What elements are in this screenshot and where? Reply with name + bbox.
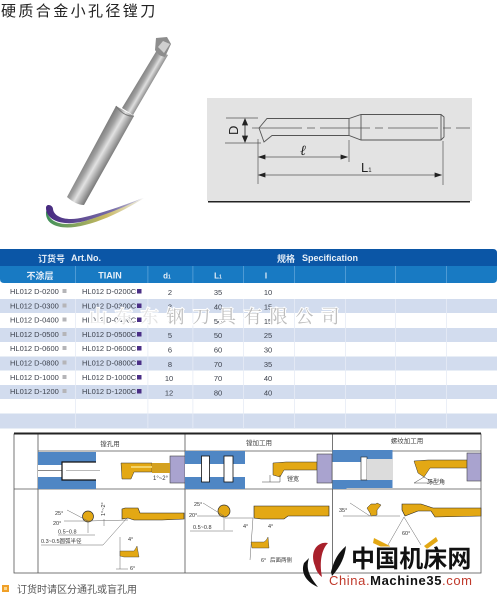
icon: boring tool photo [46, 37, 171, 227]
table rows: HL012 D-1200 [10, 387, 59, 396]
table header: order number and specification: Specification [302, 253, 358, 263]
table header: columns: TIAIN [98, 270, 122, 280]
frame [14, 434, 481, 573]
diagram: thread tool [414, 453, 481, 486]
table header: columns [0, 266, 497, 283]
diagram: bore geometry: 20° [53, 521, 61, 527]
diagram: grooving geometry: 4° [268, 524, 273, 530]
diagram: thread geometry: 60° [402, 531, 410, 537]
icon: orange square bullet [2, 585, 9, 592]
panel: dimension drawing: L1 [361, 160, 372, 175]
table rows: HL012 D-0400C [82, 316, 137, 324]
diagram: bore geometry: 0.3~0.5圆弧半径 [41, 537, 82, 545]
heading: grooving: 镗加工用 [246, 438, 272, 447]
diagram: grooving tool [262, 451, 346, 489]
striped rows [0, 299, 497, 428]
diagram: grooving workpiece [185, 451, 245, 489]
logo url: China.Machine35.com [329, 573, 472, 588]
table rows: 40 [214, 302, 222, 312]
table rows: 30 [264, 346, 272, 354]
table rows: 50 [214, 331, 222, 340]
diagram: grooving geometry: 6° [261, 558, 266, 564]
table rows: 50 [214, 317, 222, 326]
table rows: 10 [165, 374, 173, 383]
watermark: 山东东钢刀具有限公司 [89, 307, 347, 327]
table header: order number and specification: Art.No. [71, 253, 101, 263]
diagram: bore geometry [41, 502, 184, 572]
table header: order number and specification [0, 249, 497, 266]
table rows: HL012 D-0800C [82, 358, 137, 368]
table rows: 25 [264, 331, 272, 340]
diagram: thread geometry: 35° [339, 508, 347, 514]
table rows: 35 [214, 288, 222, 297]
table rows: HL012 D-0600 [10, 344, 59, 353]
diagram: grooving geometry: 后面两侧 [270, 556, 293, 564]
table rows: 70 [214, 360, 222, 369]
heading: bore: 镗孔用 [100, 439, 120, 448]
table header: columns: 不涂层 [26, 270, 54, 281]
diagram: thread workpiece [332, 450, 393, 488]
table rows [10, 287, 272, 398]
table rows: HL012 D-0400 [10, 316, 59, 324]
table rows: HL012 D-0300C [82, 302, 137, 310]
table header: order number and specification: 订货号 [38, 253, 65, 264]
table rows: 70 [214, 374, 222, 383]
table rows: HL012 D-0500 [10, 330, 59, 339]
table header: columns: I [265, 272, 267, 280]
diagram: bore geometry: 1°~2° [101, 502, 107, 516]
diagram: grooving tool: 镗宽 [287, 475, 299, 483]
tool outline [225, 114, 470, 185]
table rows: 4 [168, 317, 172, 326]
table rows: 3 [168, 302, 172, 312]
panel: dimension drawing: ℓ [300, 144, 306, 159]
table rows: HL012 D-0300 [10, 302, 59, 310]
diagram: bore tool: 1°~2° [153, 476, 169, 482]
table rows: 35 [264, 360, 272, 369]
diagram: grooving geometry: 4° [243, 524, 248, 530]
table rows: HL012 D-0200C [82, 287, 137, 296]
table header: columns: L1 [214, 272, 222, 280]
diagram: thread geometry [339, 503, 481, 550]
table header: columns: d1 [163, 272, 171, 280]
diagram: bore geometry: 4° [128, 537, 133, 543]
table rows: 15 [264, 317, 272, 326]
table rows: 12 [165, 388, 173, 398]
table rows: HL012 D-1200C [82, 387, 137, 396]
diagram: grooving geometry [189, 502, 329, 564]
diagram: bore geometry: 6° [130, 566, 135, 572]
table rows: HL012 D-1000 [10, 373, 59, 382]
diagram: grooving geometry: 25° [194, 502, 202, 508]
diagram: bore workpiece [38, 452, 100, 489]
title: 硬质合金小孔径镗刀 [1, 3, 158, 20]
table rows: 40 [264, 374, 272, 383]
table rows: 5 [168, 331, 172, 340]
diagram: thread tool: 牙型角 [427, 478, 445, 486]
diagram: bore geometry: 25° [55, 511, 63, 517]
coating markers [62, 289, 66, 393]
labels: D [226, 126, 241, 135]
icon: logo swoosh [303, 543, 346, 587]
dimension arrows [242, 119, 441, 177]
table [0, 249, 497, 429]
logo [303, 543, 472, 588]
table rows: 60 [214, 346, 222, 354]
diagram: bore geometry: 0.5~0.8 [58, 530, 77, 536]
table rows: 40 [264, 388, 272, 398]
panel: machining diagrams [14, 432, 481, 573]
table rows: 15 [264, 302, 272, 312]
table rows: 10 [264, 288, 272, 297]
table rows: HL012 D-0500C [82, 330, 137, 339]
table rows: HL012 D-0200 [10, 287, 59, 296]
table rows: HL012 D-0800 [10, 358, 59, 368]
table rows: 6 [168, 346, 172, 354]
table header: order number and specification: 规格 [277, 253, 295, 264]
table rows: HL012 D-0600C [82, 344, 137, 353]
footnote: 订货时请区分通孔或盲孔用 [17, 583, 137, 596]
table rows: 8 [168, 360, 172, 369]
diagram: grooving geometry: 20° [189, 513, 197, 519]
logo name: 中国机床网 [351, 546, 472, 573]
diagram: grooving geometry: 0.5~0.8 [193, 525, 212, 531]
heading: threading: 螺纹加工用 [391, 436, 423, 445]
table rows: HL012 D-1000C [82, 373, 137, 382]
panel: dimension drawing [207, 98, 472, 202]
table rows: 80 [214, 388, 222, 398]
diagram: bore tool [121, 451, 199, 489]
swoosh [46, 198, 144, 227]
table rows: 2 [168, 288, 172, 297]
